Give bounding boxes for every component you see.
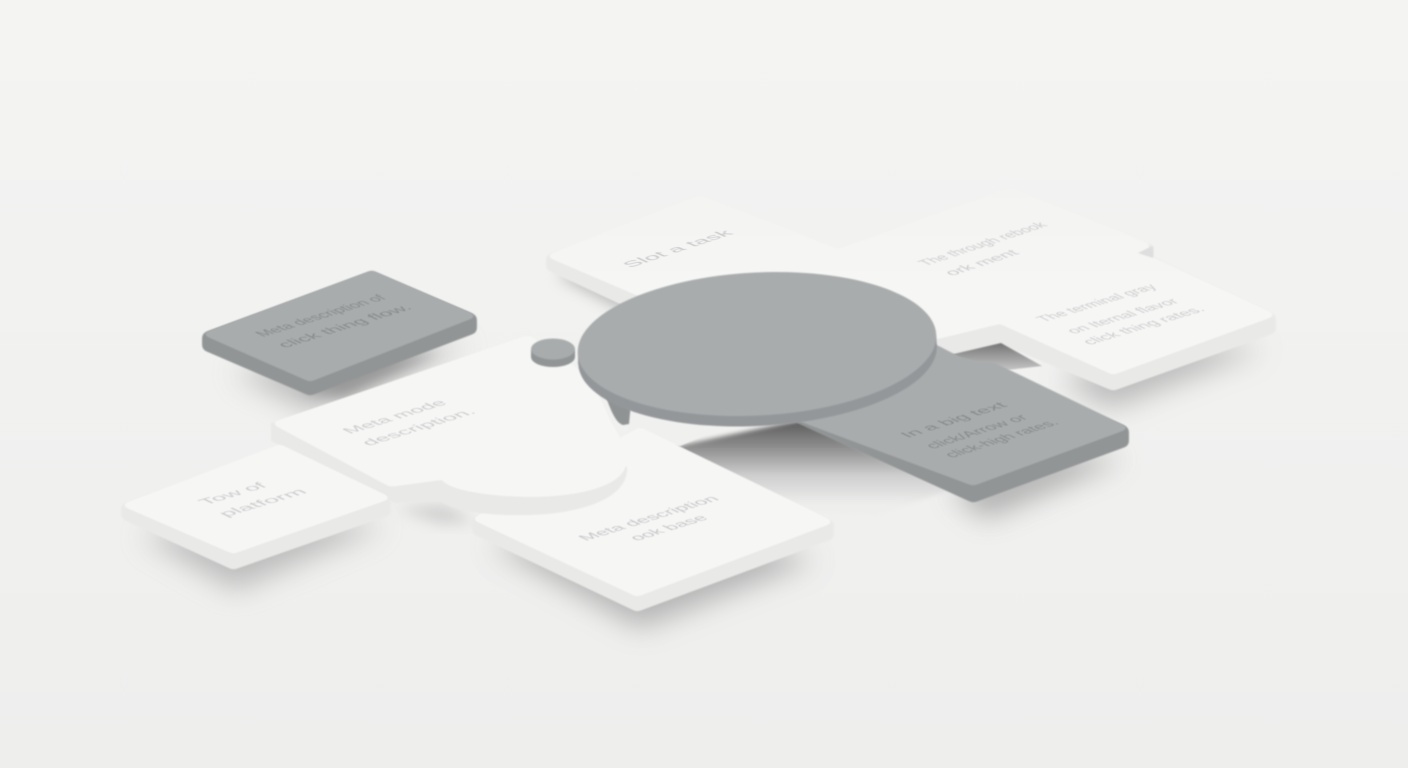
text: right dark description: click-high rates. xyxy=(941,418,1064,460)
text: dark tile description: Meta description of xyxy=(252,293,391,339)
disc edge xyxy=(574,267,941,435)
text: slot a task: Slot a task xyxy=(619,228,738,270)
text: terminal description: click thing rates. xyxy=(1079,305,1210,347)
text: left tile description: platform xyxy=(215,487,312,519)
text: through rebook: ork ment xyxy=(941,248,1024,278)
tile top xyxy=(793,345,1128,485)
teardrop top xyxy=(270,336,626,497)
tile top xyxy=(203,271,476,381)
text: right dark description: click/Arrow or xyxy=(922,413,1033,451)
text: left tile description xyxy=(195,481,312,519)
panel: center white teardrop tile xyxy=(270,336,627,515)
text: center tile description: description. xyxy=(358,407,481,448)
tile side xyxy=(203,272,476,395)
notch shading xyxy=(1138,246,1153,258)
icon: grey tail xyxy=(576,362,632,425)
panel: bottom white tile xyxy=(473,428,833,611)
shadow in notch above right dark tile xyxy=(945,343,1042,372)
text: terminal description: on Iternal flavor xyxy=(1063,297,1184,336)
tile side xyxy=(473,440,833,611)
tile top face xyxy=(547,189,1275,374)
tile side xyxy=(122,446,390,569)
icon: small grey disc xyxy=(531,338,575,367)
panel: right dark tile xyxy=(793,345,1128,502)
text: center tile description xyxy=(339,398,481,448)
text: bottom tile description: Meta description xyxy=(575,494,724,543)
teardrop side xyxy=(271,400,627,515)
text: right dark description: In a big text xyxy=(897,400,1012,440)
panel: central large grey disc xyxy=(574,263,941,435)
text: dark tile description xyxy=(252,293,417,350)
tile side xyxy=(793,358,1128,502)
tile top xyxy=(122,445,390,553)
text: left tile description: Tow of xyxy=(195,481,273,507)
cast shadows xyxy=(140,270,1265,628)
text: through rebook: The through rebook xyxy=(915,220,1052,268)
panel: left white tile xyxy=(122,445,390,569)
connector strip under disc xyxy=(625,412,740,446)
panel: upper-left dark tile xyxy=(203,271,476,395)
text: center tile description: Meta mode xyxy=(339,398,452,436)
tile top xyxy=(473,428,833,596)
disc top xyxy=(574,263,940,425)
text: dark tile description: click thing flow. xyxy=(274,303,417,350)
tile side faces xyxy=(547,200,1275,390)
text: right dark description xyxy=(897,400,1064,460)
text: terminal description: The terminal gray xyxy=(1033,282,1162,324)
panel: top white tile group xyxy=(547,189,1275,390)
text: terminal description xyxy=(1033,282,1210,347)
text: bottom tile description: ook base xyxy=(626,513,713,543)
shadow gap under central disc xyxy=(672,420,950,515)
